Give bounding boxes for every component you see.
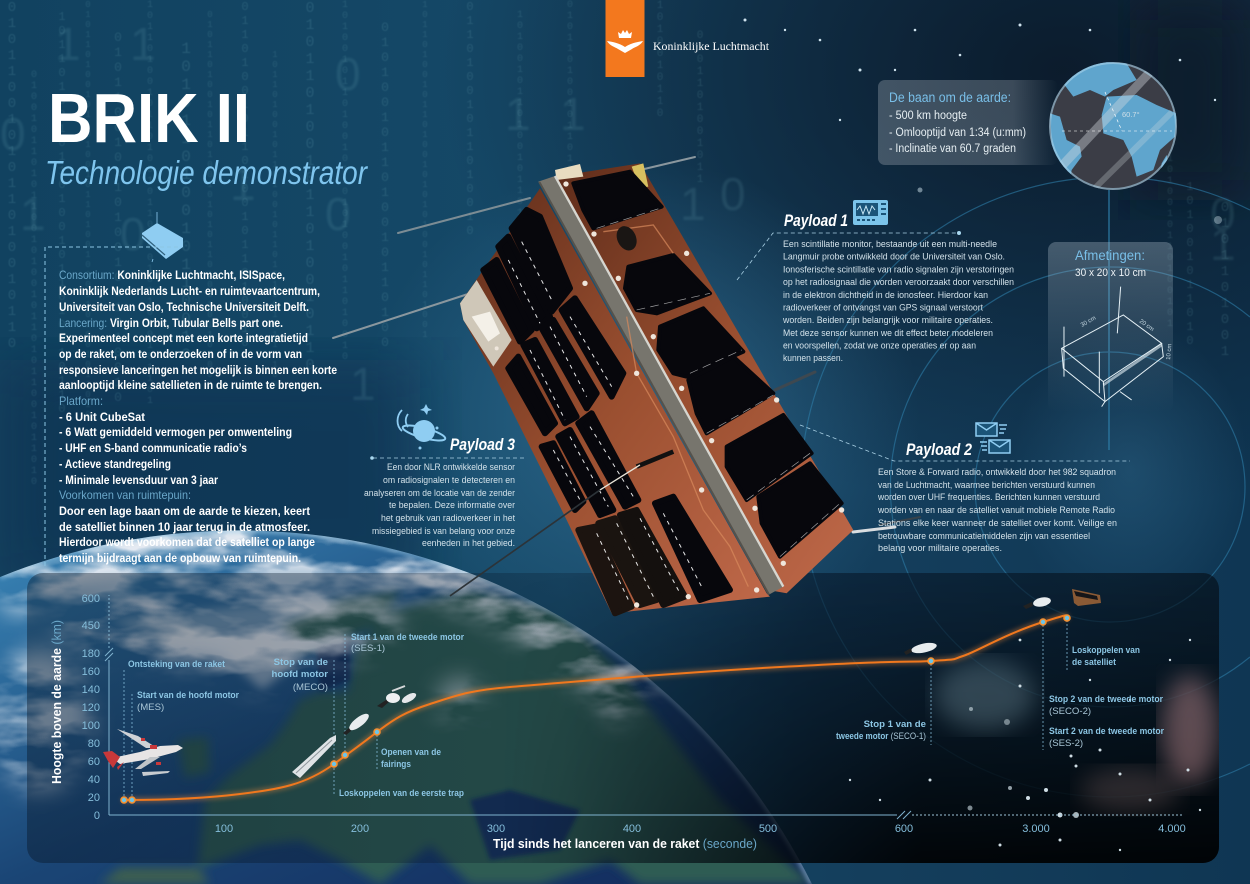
solar cells right: [573, 172, 842, 557]
background: large binary digits: 0: [0, 108, 26, 160]
background: large binary digits: 1: [20, 188, 46, 240]
icon: fairings separating: [377, 686, 418, 708]
y axis: 600: [82, 593, 100, 605]
silver corner: [460, 280, 512, 367]
background: binary digit columns: 1011010010110100101101001011010101101: [144, 0, 156, 407]
payload 1: [737, 200, 1014, 364]
text block: mission description: Lancering: Virgin Orbit, Tubular Bells part one.: [59, 316, 283, 330]
y axis: 80: [88, 738, 100, 750]
land masses: [100, 590, 812, 884]
panel: orbit info: De baan om de aarde:: [889, 90, 1011, 105]
payload 3: [364, 404, 524, 549]
logo: Koninklijke Luchtmacht: Koninklijke Luchtmacht: [653, 39, 770, 53]
payload 2: Payload 2: [906, 440, 972, 459]
text: Een Store & Forward radio, ontwikkeld door het 982 squadron: [878, 467, 1116, 478]
leader line: [800, 425, 1130, 461]
background: binary digit columns: 10110100101101001011010010110: [55, 10, 69, 416]
background: large binary digits: 0: [335, 48, 361, 100]
leader line: main text: [45, 247, 178, 567]
satellite antennas: [333, 157, 920, 532]
background: binary digit columns: 0101100101011010010110: [4, 0, 20, 352]
event labels: [128, 632, 1164, 799]
background: large binary digits: 0: [325, 188, 351, 240]
text: op het radiosignaal die worden veroorzaakt door verschillen: [783, 277, 1014, 288]
text: Langmuir probe ontwikkeld door de Universiteit van Oslo.: [783, 252, 1005, 262]
background: binary digit columns: 0101101001011: [694, 30, 706, 186]
title: BRIK II: [48, 79, 250, 157]
text: in de elektron dichtheid in de ionosfeer. Hierdoor kan: [783, 290, 988, 301]
y axis: 140: [82, 684, 100, 696]
background: large binary digits: 0: [1210, 188, 1236, 240]
event labels: (MECO): [293, 682, 328, 693]
text: [877, 467, 1117, 554]
event labels: Start 2 van de tweede motor: [1049, 726, 1164, 737]
text block: mission description: Experimenteel concept met een korte integratietijd: [59, 331, 308, 345]
icon: envelopes: [976, 423, 1010, 453]
text: radioverkeer of ontvangst van GPS signaal verstoort: [783, 302, 983, 314]
background: binary digit columns: 01011010010110100101: [1164, 110, 1176, 330]
y axis: 40: [88, 774, 100, 786]
background: binary digit columns: 0101100101101001011010010: [110, 30, 126, 405]
chart: launch altitude profile: [49, 589, 1186, 851]
event labels: Start van de hoofd motor: [137, 690, 239, 701]
background: binary digit columns: 0110100101101001011010010: [238, 0, 252, 350]
trajectory curve: [124, 615, 1067, 800]
panel: dimensions: 30 x 20 x 10 cm: [1075, 267, 1146, 279]
text block: mission description: Universiteit van Oslo, Technische Universiteit Delft.: [59, 300, 309, 314]
text block: mission description: op de raket, om te onderzoeken of in de vorm van: [59, 347, 302, 361]
text: belang voor militaire operaties.: [878, 543, 1002, 554]
text block: mission description: - Actieve standregeling: [59, 457, 171, 471]
x axis title: Tijd sinds het lanceren van de raket (seconde): [493, 836, 757, 851]
y axis: 120: [82, 702, 100, 714]
clouds: [0, 530, 662, 804]
text block: mission description: aanlooptijd kleine satellieten in de ruimte te brengen.: [59, 378, 322, 392]
y axis: 160: [82, 666, 100, 678]
event labels: fairings: [381, 759, 411, 770]
x axis: 3.000: [1022, 823, 1050, 835]
background: binary digit columns: 01011010010110100101: [564, 0, 576, 220]
rail: [538, 176, 783, 595]
text: analyseren om de locatie van de zender: [364, 488, 516, 499]
text block: mission description: Door een lage baan om de aarde te kiezen, keert: [59, 504, 310, 518]
event labels: hoofd motor: [272, 669, 328, 680]
background: earth: [0, 530, 812, 884]
background: large binary digits: 1: [130, 18, 156, 70]
background: large binary digits: 1: [350, 358, 376, 410]
stars top right: [744, 18, 1222, 224]
text: [364, 462, 516, 549]
panel: orbit info: - 500 km hoogte: [889, 110, 967, 122]
leader line: [737, 233, 958, 280]
panel: orbit info: - Inclinatie van 60.7 graden: [889, 143, 1016, 155]
icon: second stage: [343, 711, 371, 735]
text: missiegebied is van belang voor onze: [372, 526, 515, 537]
background: binary digit columns: 1011010010110100101101010010110100: [270, 50, 280, 390]
background: binary digit columns: 010110100101101001011010010101101001011010: [83, 0, 93, 420]
event labels: Ontsteking van de raket: [128, 659, 226, 670]
event labels: Stop van de: [274, 657, 328, 668]
sea: [316, 640, 580, 860]
background: large binary digits: 1: [560, 88, 586, 140]
panel: dimensions: Afmetingen:: [1075, 248, 1145, 263]
text: betrouwbare communicatiemiddelen zijn van essentieel: [878, 531, 1090, 542]
icon: scintillation monitor: [853, 200, 888, 225]
text: eenheden in het gebied.: [422, 538, 515, 549]
text: en voorspellen, zodat we onze operaties er op aan: [783, 340, 976, 352]
text block: mission description: - 6 Watt gemiddeld vermogen per omwenteling: [59, 425, 292, 439]
y axis: 100: [82, 720, 100, 732]
text: Stations elke keer wanneer de satelliet over komt. Veilige en: [878, 518, 1117, 529]
icon: carrier aircraft: [103, 729, 183, 776]
background: binary digit columns: 01011010010110100101010110100101101001: [205, 10, 215, 390]
text: het gebruik van radioverkeer in het: [381, 513, 515, 524]
x axis: 200: [351, 823, 369, 835]
text: Met deze sensor kunnen we dit effect beter modeleren: [783, 328, 993, 339]
globe with orbit inclination: [1049, 62, 1177, 190]
text block: mission description: Hierdoor wordt voorkomen dat de satelliet op lange: [59, 535, 315, 549]
icon: first stage: [292, 735, 336, 778]
solar cells left: [483, 210, 730, 613]
background: large binary digits: [0, 18, 1236, 410]
y axis: [82, 593, 113, 822]
y axis: 60: [88, 756, 100, 768]
y axis title: Hoogte boven de aarde (km): [49, 620, 64, 784]
event labels: de satelliet: [1072, 657, 1117, 668]
text block: mission description: Voorkomen van ruimtepuin:: [59, 488, 191, 502]
background: binary digit columns: 0101101001011010010110: [302, 0, 318, 374]
panel: dimensions: 20 cm: [1138, 319, 1155, 333]
text block: mission description: Platform:: [59, 394, 103, 408]
icon: crown and wings: [607, 30, 643, 53]
payload 3: Payload 3: [450, 435, 515, 454]
event labels: Loskoppelen van: [1072, 645, 1140, 656]
text: Een scintillatie monitor, bestaande uit een multi-needle: [783, 239, 997, 250]
panel: dimensions: [1048, 242, 1173, 412]
right panel: [555, 163, 853, 593]
text block: mission description: - 6 Unit CubeSat: [59, 410, 145, 424]
text: worden over UHF frequenties. Berichten kunnen verstuurd: [877, 492, 1100, 503]
background: large binary digits: 1: [230, 158, 256, 210]
panel: dimensions: 30 cm: [1080, 315, 1097, 329]
icon: deployed satellite: [1072, 589, 1101, 606]
text block: mission description: - UHF en S-band communicatie radio’s: [59, 441, 247, 455]
payload 1: Payload 1: [784, 211, 848, 230]
icon: upper stage 1: [904, 641, 938, 655]
background: binary digit columns: 101001011010: [1183, 180, 1197, 348]
wireframe satellite: [1062, 287, 1163, 407]
background: binary digit columns: 1010010110100101101: [514, 10, 526, 219]
background: binary digit columns: 101011010010110010: [177, 40, 195, 364]
text block: mission description: Consortium: Koninklijke Luchtmacht, ISISpace,: [59, 268, 285, 282]
traces: [603, 225, 748, 587]
background: concentric orbit arcs: [801, 177, 1250, 797]
leader line: [373, 457, 524, 459]
icon: upper stage 2: [1023, 596, 1052, 609]
event labels: Loskoppelen van de eerste trap: [339, 788, 464, 799]
event labels: tweede motor (SECO-1): [836, 731, 926, 742]
icon: cubesat: [142, 212, 183, 262]
text block: mission description: [59, 268, 337, 565]
text: kunnen passen.: [783, 353, 843, 364]
antenna across left side: [637, 452, 673, 467]
event labels: Start 1 van de tweede motor: [351, 632, 464, 643]
background: binary digit columns: [4, 0, 1233, 488]
background: binary digit columns: 01001011010110010100101101011001011010: [28, 70, 40, 488]
atmosphere edge: [0, 530, 812, 884]
event labels: Openen van de: [381, 747, 441, 758]
background: binary digit columns: 1010010110: [654, 0, 666, 120]
event markers: [121, 615, 1070, 803]
text: Een door NLR ontwikkelde sensor: [387, 462, 516, 473]
x axis: 300: [487, 823, 505, 835]
background: large binary digits: 1: [505, 88, 531, 140]
panel: orbit info: [878, 80, 1058, 165]
icon: planet and signal: [398, 404, 447, 450]
x axis: 4.000: [1158, 823, 1186, 835]
y axis: 0: [94, 810, 100, 822]
payload 2: [800, 423, 1130, 554]
satellite: [450, 163, 853, 613]
panel: dimensions: 10 cm: [1166, 343, 1173, 360]
text block: mission description: Koninklijk Nederlands Lucht- en ruimtevaartcentrum,: [59, 284, 320, 298]
background: binary digit columns: 01101001011010010: [463, 0, 477, 238]
text block: mission description: responsieve lanceringen het mogelijk is binnen een korte: [59, 363, 337, 377]
text: worden. Beiden zijn belangrijk voor militaire operaties.: [782, 315, 993, 326]
x axis: 100: [215, 823, 233, 835]
text block: mission description: termijn bijdraagt aan de opbouw van ruimtepuin.: [59, 551, 301, 565]
text: worden van en naar de satelliet vanuit mobiele Remote Radio: [877, 505, 1115, 516]
text block: mission description: de satelliet binnen 10 jaar terug in de atmosfeer.: [59, 520, 310, 534]
left panel: [460, 188, 770, 613]
text: [782, 239, 1014, 364]
background: large binary digits: 1: [55, 18, 81, 70]
background: large binary digits: 0: [120, 208, 146, 260]
text: te bepalen. Deze informatie over: [389, 500, 516, 511]
x axis: 600: [895, 823, 913, 835]
y axis: 180: [82, 648, 100, 660]
event labels: (SES-1): [351, 643, 385, 654]
panel: orbit info: - Omlooptijd van 1:34 (u:mm): [889, 127, 1026, 139]
event labels: Stop 1 van de: [864, 719, 926, 730]
subtitle: Technologie demonstrator: [45, 154, 369, 191]
event labels: (SES-2): [1049, 738, 1083, 749]
x axis: [109, 811, 1186, 835]
y axis: 20: [88, 792, 100, 804]
logo: Koninklijke Luchtmacht: [606, 0, 770, 77]
event labels: (SECO-2): [1049, 706, 1091, 717]
rivets: [495, 181, 844, 608]
background: large binary digits: 1: [1210, 218, 1236, 270]
background: binary digit columns: 1011010010110100101010100101101001: [420, 0, 430, 340]
x axis: 500: [759, 823, 777, 835]
text: van de Luchtmacht, waarmee berichten verstuurd kunnen: [878, 480, 1095, 491]
event labels: (MES): [137, 702, 164, 713]
x axis: 400: [623, 823, 641, 835]
text: om radiosignalen te detecteren en: [383, 475, 515, 486]
globe with orbit inclination: 60.7°: [1122, 110, 1140, 119]
background: binary digit columns: 101001011010010110101001011010010: [340, 0, 350, 363]
text block: mission description: - Minimale levensduur van 3 jaar: [59, 473, 218, 487]
event labels: Stop 2 van de tweede motor: [1049, 694, 1163, 705]
cell dashes: [508, 208, 840, 603]
background: large binary digits: 0: [720, 168, 746, 220]
event drop lines: [124, 620, 1067, 800]
text: Ionosferische scintillatie van radio signalen zijn verstoringen: [783, 264, 1014, 276]
y axis: 450: [82, 620, 100, 632]
background: large binary digits: 1: [680, 178, 706, 230]
background: binary digit columns: 0101001011010010110100: [378, 20, 392, 350]
panel: launch chart backdrop: [27, 573, 1219, 863]
background: binary digit columns: 0101101001: [1217, 200, 1233, 360]
camera lens: [613, 223, 640, 254]
